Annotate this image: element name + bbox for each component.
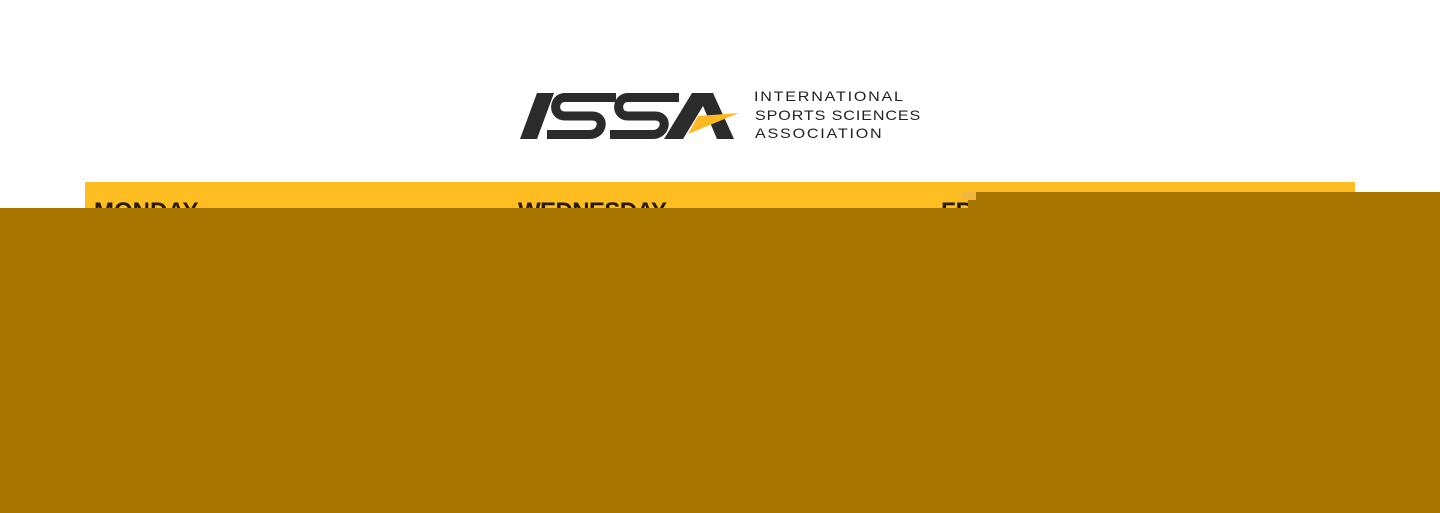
logo wordmark: SPORTS SCIENCES [755, 107, 921, 123]
panel: dimmed overlay step [968, 200, 976, 208]
logo: ISSA [520, 88, 921, 141]
panel: schedule header band [85, 182, 1355, 222]
logo wordmark: INTERNATIONAL [754, 88, 905, 104]
logo wordmark [754, 88, 921, 141]
logo mark [520, 93, 739, 139]
heading: Wednesday: WEDNESDAY [518, 198, 666, 225]
logo wordmark: ASSOCIATION [755, 125, 883, 141]
panel: dimmed overlay upper right [976, 192, 1440, 222]
panel: lighter loading patch [961, 192, 976, 200]
heading: Friday: FRIDAY [941, 198, 1028, 225]
panel: dimmed overlay main [0, 208, 1440, 513]
heading: Monday: MONDAY [94, 198, 198, 225]
